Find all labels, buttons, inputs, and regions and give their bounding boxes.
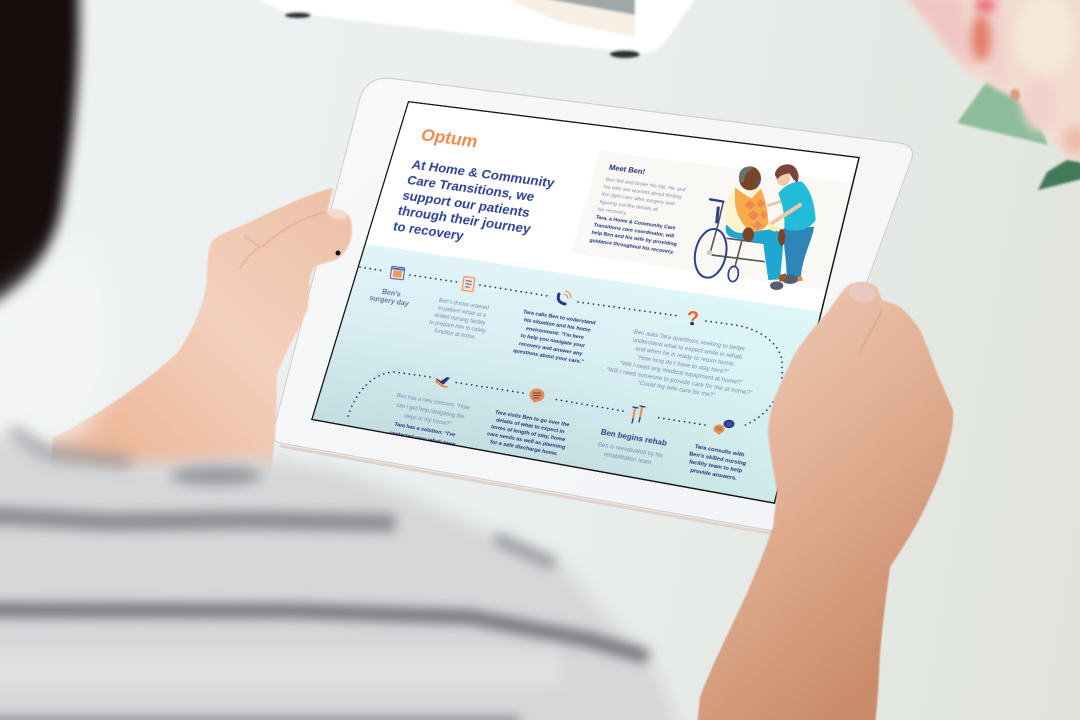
person: striped shirt (0, 430, 685, 720)
Tara introduction text: guidance throughout his recovery. (589, 238, 675, 255)
wheelchair (691, 199, 765, 282)
tablet screen (311, 101, 860, 504)
step: Ben asks questions: Ben asks Tara questions seeking to better (633, 328, 746, 352)
step: doctor order: skilled nursing facility (434, 312, 486, 326)
person: hair (0, 0, 79, 320)
step: Ben asks questions: and when he is ready to return home. (635, 345, 736, 368)
icon: walking shoe (435, 377, 450, 388)
step: Tara consults team: facility team to help (688, 459, 743, 474)
main heading: Care Transitions, we (405, 173, 536, 204)
step: Ben's surgery day (368, 288, 410, 308)
Ben (726, 166, 786, 290)
step: Ben begins rehab heading: Ben begins rehab (600, 428, 668, 448)
step: Tara calls Ben: Tara calls Ben to understand (522, 309, 596, 326)
main heading: through their journey (396, 204, 532, 237)
step: Ben begins rehab text: rehabilitation team. (603, 451, 654, 466)
Optum logo: Optum (419, 125, 480, 151)
step: Tara calls Ben: his situation and his home (523, 317, 591, 333)
teal timeline background (312, 244, 824, 506)
step: doctor order: in-patient rehab at a (437, 305, 487, 318)
Meet Ben story text (597, 176, 686, 216)
panel: Meet Ben (571, 151, 855, 291)
step: Tara consults team (688, 443, 747, 481)
icon: crutches (632, 406, 645, 423)
Tara (767, 164, 816, 284)
step: Ben asks questions: “Will I need any medical equipment at home?” (619, 360, 743, 386)
dotted timeline path: bottom row (347, 372, 773, 426)
Meet Ben story text: figuring out the details of (599, 199, 658, 212)
step: Tara calls Ben: questions about your care.” (513, 348, 585, 365)
Meet Ben story text: his recovery. (597, 206, 628, 216)
main heading: support our patients (401, 188, 532, 220)
icon: question mark: ? (687, 308, 699, 330)
step: Tara calls Ben (513, 309, 596, 365)
step: Tara consults team: provide answers. (690, 467, 738, 481)
step: Tara visits Ben: care needs as well as planning (486, 430, 566, 450)
icon: document (462, 276, 475, 292)
step: Tara calls Ben: environment: “I'm here (525, 325, 585, 340)
step: Ben begins rehab text: Ben is reevaluated by his (597, 441, 664, 459)
step: Ben asks questions: “How long do I have to stay here?” (636, 354, 730, 375)
flowers (903, 0, 1080, 190)
icon: speech bubble (530, 388, 544, 403)
step: Ben asks questions: “Could my wife care for me?” (637, 379, 716, 399)
person: pale shoulder (0, 230, 114, 445)
right hand and forearm (697, 281, 953, 720)
icon: two chat bubbles (714, 420, 734, 435)
Tara introduction text: Tara, a Home & Community Care (595, 215, 676, 231)
main heading (391, 157, 556, 243)
Tara introduction text: Transitions care coordinator, will (593, 222, 675, 239)
step: Tara visits Ben: terms of length of stay, home (490, 423, 566, 442)
step: Tara consults team: Ben's skilled nursing (688, 450, 747, 467)
step: Tara visits Ben: Tara visits Ben to go over the (494, 409, 570, 428)
step: new concern and solution: steps in my home?” (403, 412, 452, 427)
step: Ben asks questions (606, 328, 753, 399)
tablet camera (336, 250, 340, 256)
step: Ben asks questions: understand what to expect while in rehab (632, 337, 743, 360)
step: Ben's surgery day: Ben's (381, 288, 402, 298)
step: doctor order: function at home. (434, 327, 477, 340)
Meet Ben story text: the right care after surgery and (601, 191, 675, 207)
step: doctor order: Ben's doctor ordered (438, 297, 490, 311)
step: doctor order: to prepare him to safely (429, 319, 487, 334)
step: new concern and solution: Tara has a solution: “I've (394, 421, 456, 438)
step: Ben asks questions: “Will I need someone to provide care for me at home?” (606, 366, 753, 396)
step: Tara visits Ben: for a safe discharge home. (490, 439, 559, 457)
Tara introduction text: help Ben and his wife by providing (591, 230, 677, 247)
Meet Ben story text: Ben fell and broke his hip. He and (605, 176, 686, 193)
main heading: At Home & Community (410, 157, 556, 191)
speaker device (240, 0, 702, 58)
step: new concern and solution: contacted your rehab team (388, 430, 456, 447)
icon: calendar (390, 266, 405, 280)
step: new concern and solution: can I get help navigating the (396, 401, 465, 420)
step: Ben's surgery day: surgery day (368, 294, 410, 308)
step: new concern and solution: Ben has a new concern: “How (396, 392, 470, 411)
step: doctor order (429, 297, 490, 340)
step: Tara calls Ben: to help you navigate your (520, 333, 586, 349)
step: Tara visits Ben: details of what to expect in (495, 417, 565, 435)
main heading: to recovery (391, 219, 465, 243)
Tara introduction text (589, 215, 677, 255)
left hand (50, 188, 352, 475)
Meet Ben heading: Meet Ben! (608, 164, 646, 176)
Meet Ben story text: his wife are worried about finding (603, 184, 682, 200)
step: Tara visits Ben (486, 409, 570, 457)
step: Tara consults team: Tara consults with (694, 443, 745, 458)
illustration: Ben in wheelchair with Tara (691, 164, 816, 290)
dotted timeline path: top row (360, 267, 782, 382)
icon: phone (558, 291, 571, 304)
step: new concern and solution (388, 392, 470, 447)
step: Tara calls Ben: recovery and answer any (518, 340, 583, 356)
